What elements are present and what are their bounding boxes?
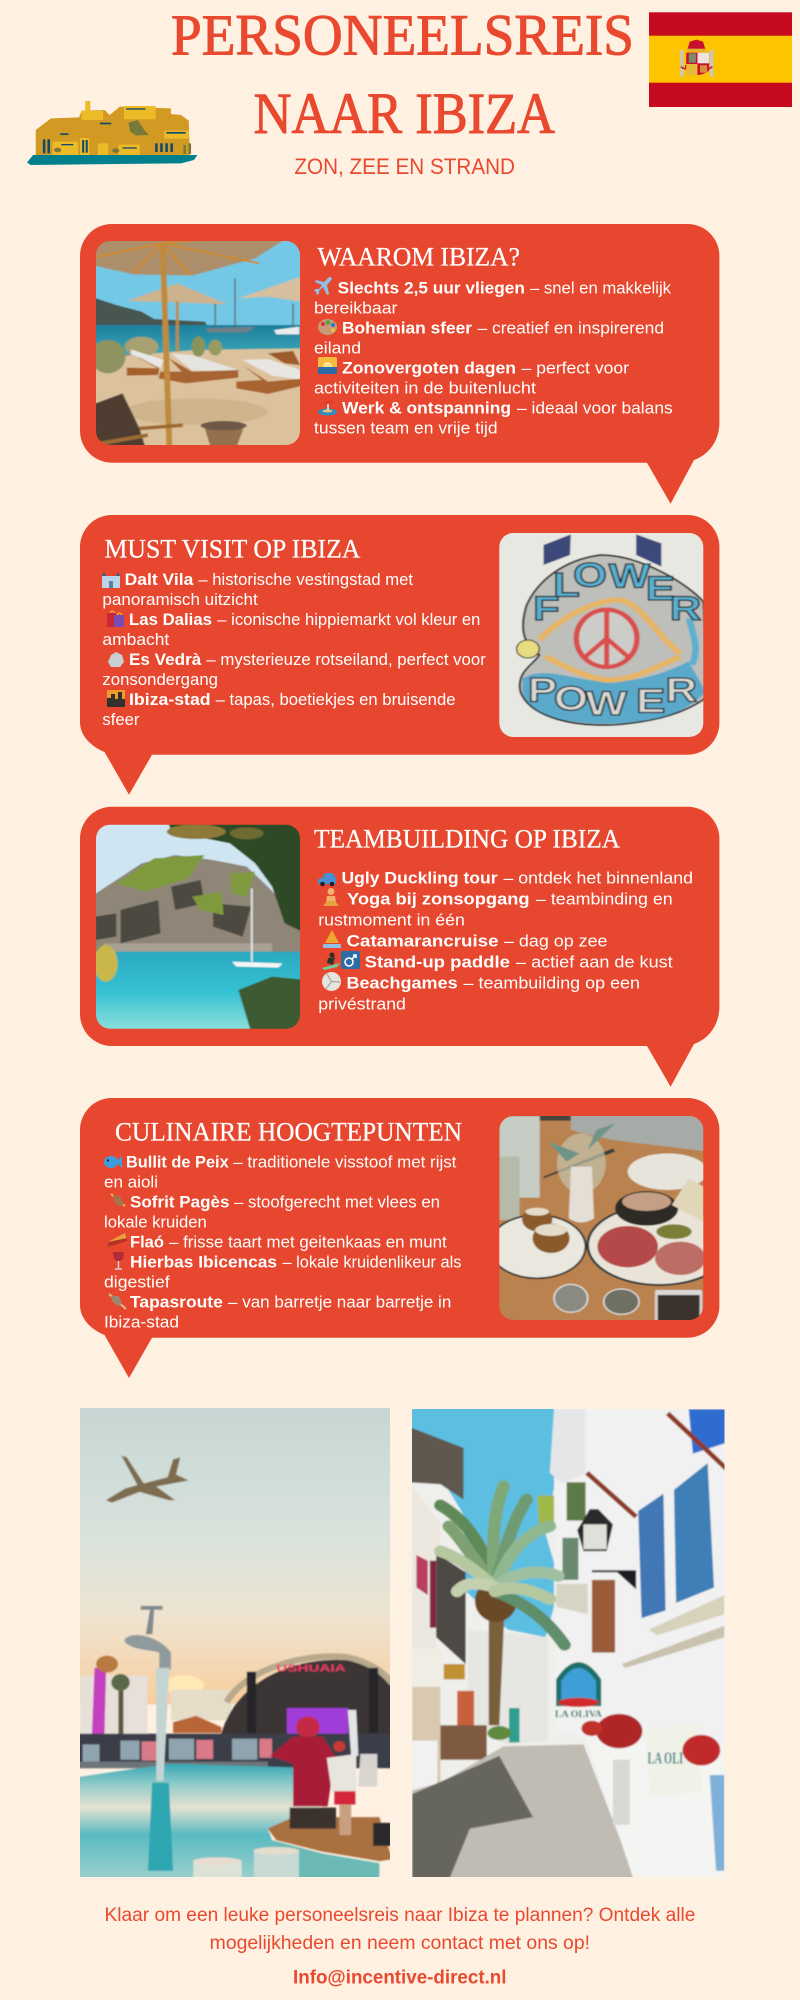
text block: tussen team en vrije tijd <box>314 419 498 437</box>
photo: flower power mosaic: E <box>646 569 675 608</box>
photo: flower power mosaic: P <box>528 671 557 710</box>
text block: bereikbaar <box>314 299 398 317</box>
text block <box>104 1153 461 1331</box>
text block: Beachgames <box>346 974 458 992</box>
text block: privéstrand <box>318 995 406 1013</box>
text block: Las Dalias <box>129 611 212 629</box>
text block: sfeer <box>102 711 140 729</box>
icon: stew skewer <box>111 1194 125 1207</box>
icon: surfer <box>322 952 340 970</box>
text block: – traditionele visstoof met rijst <box>233 1153 457 1171</box>
icon: beach umbrella <box>318 400 337 416</box>
icon: male sign <box>341 951 360 969</box>
photo: flower power mosaic: O <box>554 679 588 718</box>
text block: Bullit de Peix <box>126 1153 230 1171</box>
text block: Werk & ontspanning <box>342 399 511 417</box>
text block: – dag op zee <box>504 932 608 950</box>
text block: Bohemian sfeer <box>342 319 473 337</box>
text block: – iconische hippiemarkt vol kleur en <box>217 611 480 629</box>
text block: – snel en makkelijk <box>530 279 672 297</box>
text block: – ideaal voor balans <box>517 399 673 417</box>
icon: sailboat <box>323 930 341 948</box>
text block <box>318 869 693 1013</box>
photo: rocky bay with sailboat <box>91 820 306 1032</box>
text block: – van barretje naar barretje in <box>228 1293 451 1311</box>
title: NAAR IBIZA <box>254 81 555 146</box>
icon: city at night <box>107 690 125 707</box>
text block: Ibiza-stad <box>104 1313 179 1331</box>
text block: rustmoment in één <box>318 911 465 929</box>
heading: CULINAIRE HOOGTEPUNTEN <box>115 1117 462 1147</box>
icon: ibiza old town illustration <box>27 101 197 165</box>
contact email: Info@incentive-direct.nl <box>293 1968 506 1989</box>
photo: flower power mosaic: F <box>533 589 560 628</box>
photo: tapas table <box>499 1116 704 1320</box>
photo: flower power mosaic: R <box>670 589 701 628</box>
text block: en aioli <box>104 1173 158 1191</box>
text block: Stand-up paddle <box>365 953 510 971</box>
panel: culinaire hoogtepunten <box>80 1098 731 1378</box>
title: PERSONEELSREIS <box>171 2 634 67</box>
text block <box>314 279 673 437</box>
photo: ushuaia pool with plane <box>78 1406 392 1878</box>
icon: airplane <box>314 277 332 295</box>
text block: Tapasroute <box>130 1293 223 1311</box>
text block: Flaó <box>130 1233 164 1251</box>
photo: ibiza old town street: LA OLIVA <box>555 1709 602 1720</box>
text block: – lokale kruidenlikeur als <box>282 1253 461 1271</box>
icon: sunrise <box>318 357 337 374</box>
text block: – creatief en inspirerend <box>478 319 664 337</box>
icon: palette <box>318 319 337 335</box>
text block: Yoga bij zonsopgang <box>347 890 530 908</box>
text block: Sofrit Pagès <box>130 1193 230 1211</box>
text block: ambacht <box>102 631 170 649</box>
icon: castle <box>102 572 120 588</box>
photo: flower power mosaic: W <box>609 557 651 596</box>
icon: car <box>318 873 336 886</box>
text block: – perfect voor <box>522 359 630 377</box>
text block: – frisse taart met geitenkaas en munt <box>169 1233 447 1251</box>
text block: eiland <box>314 339 361 357</box>
heading: MUST VISIT OP IBIZA <box>104 534 360 564</box>
text block: panoramisch uitzicht <box>102 591 258 609</box>
photo: flower power mosaic: L <box>553 566 580 605</box>
photo: flower power mosaic: R <box>666 671 697 710</box>
photo: flower power mosaic: W <box>586 684 628 723</box>
text block: Es Vedrà <box>129 651 202 669</box>
photo: ibiza old town street: LA OLI <box>647 1748 683 1767</box>
panel shape <box>80 1098 719 1378</box>
photo: flower power mosaic: O <box>573 556 607 595</box>
text block: – teambinding en <box>536 890 673 908</box>
text block: Catamarancruise <box>346 932 498 950</box>
icon: fish <box>104 1156 122 1168</box>
icon: spanish flag <box>649 12 792 107</box>
icon: person in yoga pose <box>323 888 339 906</box>
heading: TEAMBUILDING OP IBIZA <box>314 824 620 854</box>
subtitle: ZON, ZEE EN STRAND <box>294 154 515 179</box>
icon: wine glass <box>113 1252 124 1269</box>
text block: Slechts 2,5 uur vliegen <box>338 279 525 297</box>
closing text: Klaar om een leuke personeelsreis naar Ibiza te plannen? Ontdek alle <box>104 1905 695 1926</box>
panel: must visit op ibiza <box>80 515 719 795</box>
icon: tapas skewer <box>109 1294 126 1309</box>
photo: ushuaia pool with plane: USHUAIA <box>276 1664 346 1675</box>
title <box>171 2 634 146</box>
text block: Ibiza-stad <box>129 691 211 709</box>
text block: – stoofgerecht met vlees en <box>234 1193 440 1211</box>
photo: flower power mosaic <box>499 533 704 737</box>
text block: – actief aan de kust <box>516 953 673 971</box>
closing text <box>104 1905 695 1954</box>
icon: shopping bags <box>107 611 124 627</box>
icon: pie slice <box>108 1233 127 1247</box>
text block: Dalt Vila <box>125 571 194 589</box>
text block: – mysterieuze rotseiland, perfect voor <box>206 651 486 669</box>
text block: – historische vestingstad met <box>198 571 413 589</box>
panel shape <box>80 515 719 795</box>
photo: ibiza old town street <box>409 1406 729 1880</box>
icon: volleyball <box>322 972 341 991</box>
text block: zonsondergang <box>102 671 218 689</box>
panel shape <box>80 807 719 1087</box>
text block <box>102 571 486 729</box>
icon: rock <box>108 652 124 667</box>
photo: flower power mosaic: E <box>636 682 665 720</box>
text block: digestief <box>104 1273 170 1291</box>
panel shape <box>80 224 719 504</box>
text block: Ugly Duckling tour <box>342 869 498 887</box>
photo: beach with parasols <box>90 238 306 448</box>
panel: waarom ibiza <box>80 224 719 504</box>
closing text: mogelijkheden en neem contact met ons op! <box>210 1933 590 1954</box>
panel: teambuilding op ibiza <box>80 807 719 1087</box>
heading: WAAROM IBIZA? <box>318 242 520 272</box>
text block: – ontdek het binnenland <box>504 869 693 887</box>
text block: lokale kruiden <box>104 1213 207 1231</box>
text block: Hierbas Ibicencas <box>130 1253 277 1271</box>
text block: – tapas, boetiekjes en bruisende <box>216 691 456 709</box>
text block: – teambuilding op een <box>464 974 640 992</box>
text block: activiteiten in de buitenlucht <box>314 379 536 397</box>
text block: Zonovergoten dagen <box>342 359 516 377</box>
